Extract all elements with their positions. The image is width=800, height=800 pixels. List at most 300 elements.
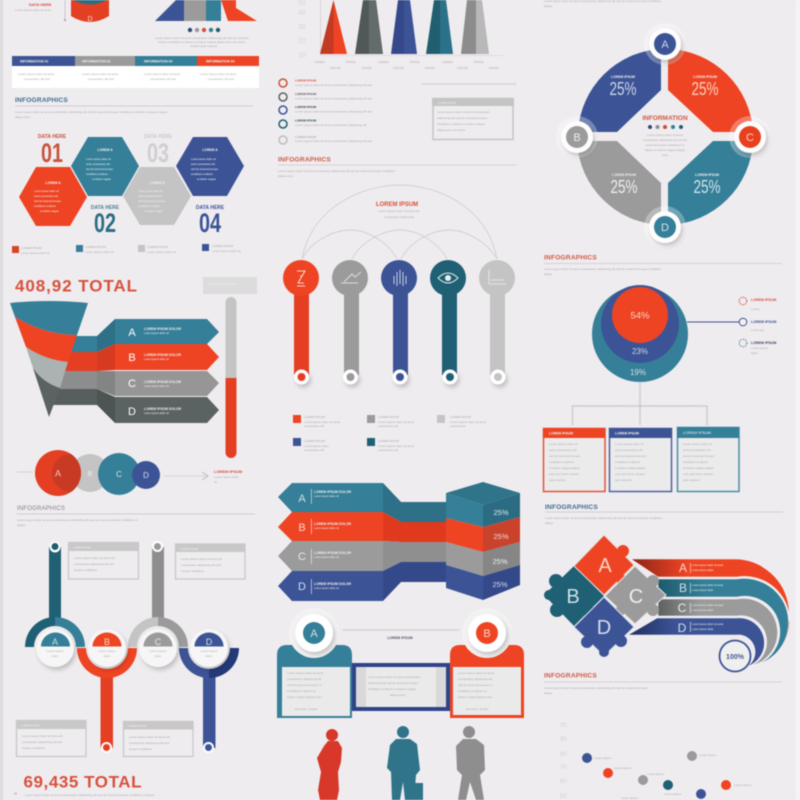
heading: infographics scatter [544, 672, 782, 695]
bullet red [279, 78, 372, 87]
hexagon group [19, 137, 244, 226]
quadrant grey: 25% [610, 177, 638, 197]
hexagon grey [123, 167, 191, 225]
data label 01: 01 [41, 138, 63, 168]
stem B [77, 648, 137, 753]
ribbon B [278, 512, 446, 542]
bullet red: Lorem ipsum dolor sit amet consectetur adipiscing elit sed [295, 83, 372, 87]
hexagon blue: sed do eiusmod tempor [191, 167, 218, 171]
panel B: ad minim veniam [466, 707, 489, 711]
quadrant red [668, 49, 753, 132]
quadrant blue [578, 49, 661, 132]
silhouette teal man [387, 726, 423, 800]
ribbon teal: B [679, 581, 687, 595]
teal lorem box: sed do eiusmod tempor [683, 454, 714, 458]
y axis labels: 50 [298, 0, 306, 7]
panel A [277, 608, 352, 718]
badge A: Lorem ipsum [46, 649, 64, 653]
ribbon teal: Lorem ipsum dolor [692, 588, 714, 592]
blue lorem box [609, 428, 672, 492]
pin legend: LOREM IPSUM [304, 415, 326, 419]
stacked perspective trapezoid fragment: tempor incididunt ut labore et dolore magna aliqua enim ad minim [158, 40, 246, 44]
badge A: dolor [52, 654, 58, 658]
data points: Lorem ipsum [664, 792, 682, 796]
heading: infographics wave: INFOGRAPHICS [17, 506, 65, 512]
pin legend: LOREM IPSUM [378, 415, 400, 419]
hexagon legend: Lorem ipsum dolor sit [212, 249, 241, 253]
arrow to lorem ipsum: LOREM IPSUM [214, 469, 243, 474]
text boxes [16, 542, 245, 756]
panel B: B [483, 628, 491, 640]
badge B [556, 116, 598, 158]
hexagon teal: incididunt ut labore [86, 172, 108, 176]
ribbon A: A [128, 327, 136, 339]
badge D: D [661, 222, 669, 234]
text boxes: consectetur adipiscing elit sed [181, 563, 221, 567]
data label 02: DATA HERE [91, 205, 120, 211]
red lorem box: LOREM IPSUM [549, 432, 573, 436]
data label 04: DATA HERE [196, 205, 225, 211]
pin legend: Lorem ipsum dolor sit amet [450, 420, 486, 424]
scatter chart [560, 723, 752, 800]
text boxes: LOREM IPSUM [21, 724, 39, 728]
quadrant blue: LOREM IPSUM [611, 75, 635, 79]
wave timeline [16, 541, 245, 756]
table with four headers: Lorem ipsum dolor sit amet [18, 72, 54, 76]
y axis labels: 30 [298, 24, 306, 31]
y axis labels: 00 [560, 723, 567, 729]
arc title: LOREM IPSUM [376, 202, 418, 208]
blue lorem box: Lorem ipsum dolor sit [615, 442, 644, 446]
data label 03: DATA HERE [144, 134, 173, 140]
nested circles chart: 54% [630, 310, 650, 322]
panel center: adipiscing elit sed do eiusmod tempor [368, 681, 418, 685]
piece A: A [598, 555, 612, 577]
panel A: A [310, 628, 318, 640]
heading: infographics circles [544, 254, 782, 276]
hexagon legend: LOREM IPSUM [147, 245, 169, 249]
y axis labels: 20 [298, 38, 306, 45]
data label 04: 04 [199, 208, 221, 238]
pin light grey [479, 260, 515, 384]
pin legend: Lorem ipsum dolor sit amet [304, 420, 340, 424]
blue lorem box: enim ad minim veniam [615, 472, 646, 476]
grey bar [461, 0, 489, 54]
ribbon D: Lorem ipsum dolor sit [314, 586, 339, 590]
panel title: LOREM IPSUM [387, 636, 413, 640]
x axis labels: DOLOR [330, 66, 342, 70]
ribbon red: Lorem ipsum dolor sit amet [692, 563, 724, 567]
heading: infographics scatter: INFOGRAPHICS [544, 672, 597, 680]
ribbon A: LOREM IPSUM DOLOR [144, 327, 182, 331]
ribbon grey: Lorem ipsum dolor sit amet [692, 603, 724, 607]
hexagon red: et dolore magna [40, 209, 59, 213]
top right caption: aliqua [544, 4, 552, 8]
ribbon A: Lorem ipsum dolor sit [314, 494, 339, 498]
ribbon A: A [298, 493, 306, 505]
lorem panel trio [277, 608, 524, 718]
panel B: incididunt ut labore et [458, 689, 487, 693]
ribbon C: Lorem ipsum dolor sit [144, 384, 169, 388]
pin legend: LOREM IPSUM [450, 415, 472, 419]
quote text [14, 791, 155, 800]
table with four headers: INFORMATION 02 [82, 60, 110, 64]
total heading 408,92: 408,92 TOTAL [15, 276, 137, 296]
ribbon blue: D [678, 621, 687, 635]
text boxes: tempor incididunt [22, 746, 45, 750]
text boxes: Lorem ipsum dolor sit amet elit [181, 557, 222, 561]
bullet red: LOREM IPSUM [295, 78, 317, 82]
100 percent circle: 100% [726, 654, 745, 661]
text boxes: LOREM IPSUM [128, 724, 146, 728]
x axis labels: LOREM [378, 60, 389, 64]
teal lorem box: amet consectetur elit [683, 448, 711, 452]
x axis labels: IPSUM [474, 60, 484, 64]
ribbon teal: Lorem ipsum dolor sit amet [692, 583, 724, 587]
data label 02: 02 [94, 208, 116, 238]
badge D: dolor [206, 654, 212, 658]
y axis labels [298, 0, 306, 59]
ribbon B: B [298, 522, 306, 534]
data label 03 [144, 134, 173, 168]
hexagon grey: sed do eiusmod tempor [138, 199, 165, 203]
x axis labels: IPSUM [362, 66, 372, 70]
heading: infographics arcs: INFOGRAPHICS [278, 156, 331, 164]
red lorem box: quis nostrud [549, 478, 566, 482]
bullet light grey [279, 135, 372, 144]
stacked cube [446, 482, 520, 600]
bullet dark grey: Lorem ipsum dolor sit amet consectetur adipiscing elit sed [295, 96, 372, 100]
centre information: labore et dolore magna aliqua [645, 148, 685, 152]
y axis labels: 60 [560, 779, 567, 785]
ribbon D: Lorem ipsum dolor sit [144, 411, 169, 415]
teal bar [426, 0, 453, 54]
cylinder chart fragment: DATA HERE [29, 2, 52, 7]
badge D: Lorem ipsum [200, 649, 218, 653]
heading: infographics circles: aliqua [544, 272, 552, 276]
pin legend: Lorem ipsum dolor sit amet [378, 420, 414, 424]
callout line and labels: LOREM IPSUM [751, 298, 776, 302]
hexagon teal: sed do eiusmod tempor [86, 167, 113, 171]
centre information [642, 115, 688, 157]
heading: infographics puzzle: INFOGRAPHICS [545, 504, 598, 511]
data points [582, 751, 752, 800]
ribbon C: LOREM IPSUM DOLOR [144, 380, 182, 384]
puzzle pieces [544, 535, 666, 657]
hexagon teal: et dolore magna [92, 177, 111, 181]
hexagon red: incididunt ut labore [34, 204, 56, 208]
data points: Lorem ipsum [734, 783, 752, 787]
centre information: enim [662, 153, 669, 157]
badge A [36, 629, 74, 667]
table with four headers: INFORMATION 01 [20, 60, 48, 64]
panel B: consectetur adipiscing elit [458, 677, 493, 681]
heading: infographics wave [17, 506, 255, 527]
heading: infographics arcs: Lorem ipsum dolor sit amet consectetur adipiscing elit sed do eiusmod tempor incididunt [278, 169, 395, 173]
quadrant teal: LOREM IPSUM [695, 173, 719, 177]
cylinder chart fragment: Lorem ipsum dolor sit amet [15, 8, 51, 12]
piece D: D [597, 617, 611, 639]
data points: Lorem ipsum [647, 772, 665, 776]
ribbon C: LOREM IPSUM DOLOR [314, 551, 352, 555]
hexagon grey: LOREM A [149, 181, 165, 185]
bullet teal [279, 118, 367, 128]
red lorem box [543, 428, 605, 492]
text boxes: tempor incididunt [74, 568, 97, 572]
stacked cube: 25% [493, 508, 509, 517]
hexagon legend [12, 244, 241, 255]
hexagon teal: LOREM A [97, 148, 113, 152]
note box [432, 98, 514, 140]
heading: infographics puzzle: Lorem ipsum dolor sit amet consectetur adipiscing elit sed do eiusmod tempor incididunt [545, 516, 662, 520]
quadrant grey [577, 141, 661, 225]
arrow to lorem ipsum: Lorem ipsum dolor [214, 475, 239, 479]
quadrant grey: LOREM IPSUM [612, 173, 636, 177]
centre information: Lorem ipsum dolor sit amet [647, 133, 683, 137]
table with four headers: Lorem ipsum dolor sit amet [144, 72, 180, 76]
text boxes: consectetur adipiscing elit sed [22, 740, 62, 744]
callout line and labels: Lorem [751, 307, 760, 311]
bullet teal: LOREM IPSUM [295, 118, 317, 122]
ribbon red: A [679, 561, 687, 575]
table with four headers [12, 56, 259, 88]
teal lorem box: et dolore magna aliqua [683, 466, 714, 470]
hexagon red: LOREM A [45, 181, 61, 185]
bullet light grey: LOREM IPSUM [295, 135, 317, 139]
badge C [729, 116, 771, 158]
stacked perspective trapezoid fragment: Lorem ipsum dolor sit amet consectetur adipiscing elit sed do eiusmod [155, 36, 249, 40]
badge C: C [746, 132, 754, 144]
pin grey [332, 260, 368, 384]
heading: infographics puzzle: aliqua [545, 521, 553, 525]
badge B: B [573, 132, 581, 144]
panel B: sed do eiusmod tempor in [458, 683, 493, 687]
stem A [25, 542, 85, 647]
bullet light grey: Lorem ipsum dolor sit amet consectetur adipiscing elit sed [295, 139, 372, 143]
nested circles chart: 23% [632, 347, 648, 356]
panel B [450, 608, 524, 718]
x axis labels: IPSUM [425, 66, 435, 70]
x axis labels: DOLOR [393, 66, 405, 70]
note box: aliqua enim ad minim [437, 128, 466, 132]
top right caption [544, 0, 661, 8]
piece C: C [629, 586, 643, 608]
arc title: consectetur adipiscing [384, 215, 414, 219]
stem C [128, 541, 188, 647]
x axis labels [314, 60, 499, 70]
callout line and labels: LOREM IPSUM [751, 341, 776, 345]
centre information: INFORMATION [642, 115, 688, 122]
table with four headers: consectetur elit sed [24, 77, 50, 81]
ribbon D [278, 562, 446, 601]
heading: infographics scatter: aliqua [544, 691, 552, 695]
ribbon B: B [128, 352, 136, 364]
funnel cone [10, 301, 88, 417]
hexagon legend: LOREM IPSUM [212, 244, 234, 248]
connecting arcs [302, 185, 497, 259]
badge B: Lorem ipsum [98, 649, 116, 653]
hexagon grey: et dolore magna [144, 209, 163, 213]
y axis labels: 40 [298, 10, 306, 17]
teal lorem box: quis nostrud [683, 478, 700, 482]
red triangle [320, 0, 347, 54]
ribbon C: C [298, 551, 306, 563]
y axis labels: 70 [560, 765, 567, 771]
callout line and labels: LOREM IPSUM [751, 320, 776, 324]
ribbon B: Lorem ipsum dolor sit [144, 357, 169, 361]
panel A: ad minim veniam [295, 707, 318, 711]
ribbon A: LOREM IPSUM DOLOR [314, 490, 352, 494]
x axis labels: DOLOR [457, 66, 469, 70]
red lorem box: sed do eiusmod tempor [549, 454, 580, 458]
ribbon grey [658, 598, 778, 666]
text boxes: consectetur adipiscing elit sed [129, 741, 169, 745]
text boxes: consectetur adipiscing elit sed [74, 562, 114, 566]
bullet dark grey: LOREM IPSUM [295, 92, 317, 96]
arc diagram with pins [283, 185, 515, 384]
stacked perspective trapezoid fragment: veniam quis nostrud [190, 44, 217, 48]
y axis labels: 50 [560, 794, 567, 800]
hexagon blue: incididunt ut labore [191, 172, 213, 176]
text boxes: Lorem ipsum dolor sit amet elit [129, 735, 170, 739]
nested circles chart: 19% [630, 368, 646, 377]
table with four headers: INFORMATION 03 [144, 60, 172, 64]
hexagon blue [176, 137, 244, 196]
text boxes: Lorem ipsum dolor sit amet elit [22, 734, 63, 738]
badge D [644, 206, 686, 248]
hexagon legend: LOREM IPSUM [85, 245, 107, 249]
note box: incididunt ut labore et dolore magna [437, 122, 485, 126]
arc title [376, 202, 420, 219]
x axis labels: IPSUM [489, 66, 499, 70]
hexagon grey: Lorem ipsum dolor sit [138, 189, 163, 193]
x axis labels: IPSUM [410, 60, 420, 64]
cylinder chart fragment: D [87, 16, 93, 23]
quadrant teal [668, 141, 753, 225]
data points: Lorem ipsum [621, 796, 639, 800]
hexagon legend: LOREM IPSUM [21, 246, 43, 250]
blue lorem box: sed do eiusmod tempor [615, 454, 646, 458]
panel A: dolore magna aliqua enim [287, 695, 322, 699]
pin legend: consectetur elit [304, 424, 324, 428]
ribbon B: LOREM IPSUM DOLOR [314, 522, 352, 526]
curved ribbons [628, 559, 790, 672]
table with four headers: consectetur elit sed [88, 77, 114, 81]
pin blue [381, 260, 417, 384]
callout line and labels [687, 297, 776, 355]
hexagon teal [71, 137, 139, 196]
panel A: incididunt ut labore et [287, 689, 316, 693]
teal lorem box [677, 427, 739, 492]
quadrant red: LOREM IPSUM [693, 75, 717, 79]
funnel with labelled ribbons [10, 301, 219, 423]
red lorem box: et dolore magna aliqua [549, 466, 580, 470]
red lorem box: Lorem ipsum dolor sit [549, 442, 578, 446]
hexagon legend: Lorem ipsum dolor sit [21, 251, 50, 255]
overlapping circles A B C D: C [116, 470, 122, 479]
pin legend: consectetur elit [378, 424, 398, 428]
hexagon teal: Lorem ipsum dolor sit [86, 157, 111, 161]
ribbon blue: Lorem ipsum dolor [692, 627, 714, 631]
bullet dark grey [279, 92, 372, 101]
circular quadrant diagram [556, 23, 771, 248]
y axis labels: 90 [560, 737, 567, 743]
nested circles chart [592, 285, 688, 382]
panel B: Lorem ipsum dolor sit amet [458, 671, 494, 675]
ribbon C [278, 541, 446, 571]
data points: Lorem ipsum [594, 756, 612, 760]
table with four headers: Lorem ipsum dolor sit amet [82, 72, 118, 76]
dotted separator [422, 83, 517, 85]
piece B: B [566, 586, 580, 608]
overlapping circles A B C D: D [143, 471, 149, 480]
heading: infographics wave: Lorem ipsum dolor sit amet consectetur adipiscing elit sed do eiusmod tempor incididunt ut [17, 518, 138, 522]
data label 03: 03 [147, 138, 169, 168]
pin red [283, 260, 319, 384]
callout line and labels: Lorem ipsum [751, 346, 769, 350]
pin legend: Lorem ipsum dolor [304, 444, 329, 448]
table with four headers: Lorem ipsum dolor sit amet [200, 72, 236, 76]
badge D [190, 629, 228, 667]
text boxes: tempor incididunt [129, 747, 152, 751]
ribbon D [97, 389, 219, 423]
centre information: eiusmod tempor incididunt ut [646, 143, 684, 147]
ribbon red: Lorem ipsum dolor [692, 568, 714, 572]
teal lorem box: Lorem ipsum dolor sit [683, 442, 712, 446]
dashed tree connector [572, 383, 707, 425]
red lorem box: enim ad minim veniam [549, 472, 580, 476]
arrow to lorem ipsum [164, 469, 243, 484]
hexagon red [19, 167, 87, 226]
hexagon grey: incididunt ut labore [138, 204, 160, 208]
note box: LOREM IPSUM [438, 101, 456, 105]
ribbon D: LOREM IPSUM DOLOR [314, 582, 352, 586]
quote text: Lorem ipsum dolor sit amet consectetur adipiscing elit sed do eiusmod tempor incididunt ut labore [25, 793, 155, 797]
thermometer bar: LOREM IPSUM DOLOR [208, 282, 236, 286]
pin legend: consectetur [450, 424, 466, 428]
centre information: consectetur adipiscing elit sed do [643, 138, 687, 142]
ribbon B [97, 344, 219, 371]
y axis labels: 80 [560, 752, 567, 758]
badge D: D [206, 637, 213, 647]
badge B [88, 629, 126, 667]
hexagon legend: Lorem ipsum dolor sit [85, 250, 114, 254]
stacked perspective trapezoid fragment [155, 0, 257, 48]
data label 01 [38, 134, 67, 168]
callout line and labels: dolor [751, 351, 758, 355]
badge C: C [155, 637, 162, 647]
x axis labels: LOREM [442, 60, 453, 64]
arc title: Lorem ipsum dolor sit amet elit [379, 209, 420, 213]
stacked cube: 25% [493, 532, 509, 541]
dark grey bar [355, 0, 383, 54]
heading: infographics circles: Lorem ipsum dolor sit amet consectetur adipiscing elit sed do eiusmod tempor incididunt [544, 267, 661, 271]
x axis labels: IPSUM [346, 60, 356, 64]
ribbon D: D [128, 406, 136, 418]
blue bar [391, 0, 417, 54]
pin teal [430, 260, 466, 384]
silhouette red woman [317, 729, 342, 800]
pin legend: Lorem ipsum dolor sit amet [378, 444, 414, 448]
quadrant teal: 25% [694, 177, 720, 197]
heading: infographics arcs: aliqua enim [278, 174, 294, 178]
ring bullet list [279, 78, 372, 144]
panel center [352, 663, 450, 711]
note box: Lorem ipsum dolor sit amet consectetur [437, 110, 490, 114]
quadrant blue: 25% [610, 79, 636, 99]
text boxes: Lorem ipsum dolor sit amet elit [74, 556, 115, 560]
hexagon legend: Lorem ipsum dolor sit [147, 250, 176, 254]
